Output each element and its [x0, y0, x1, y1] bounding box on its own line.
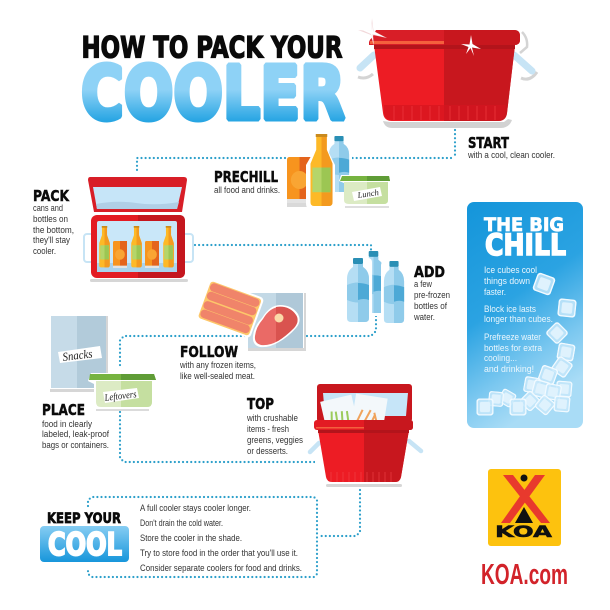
- panel heading: [484, 214, 566, 262]
- icon: falling ice cubes: [477, 273, 576, 416]
- title: how to pack your: HOW TO PACK YOUR: [82, 30, 343, 64]
- step: pack: cans and: [33, 203, 63, 213]
- dotted connector paths: [88, 130, 455, 577]
- link: koa.com: KOA.com: [481, 559, 568, 591]
- heading: keep your cool: KEEP YOUR: [47, 511, 121, 527]
- panel tips: things down: [484, 276, 530, 286]
- panel tips: bottles for extra: [484, 343, 542, 353]
- text block: cooler tips: [140, 503, 302, 573]
- panel tips: cooling...: [484, 353, 517, 363]
- raised lid: [317, 384, 412, 422]
- step: top: greens, veggies: [247, 435, 303, 445]
- text block: cooler tips: A full cooler stays cooler longer.: [140, 503, 251, 513]
- step: pack: cooler.: [33, 246, 56, 256]
- step: top: TOP: [247, 395, 274, 413]
- step: top: [246, 395, 303, 456]
- step: place: [42, 401, 109, 450]
- text block: cooler tips: Try to store food in the order that you'll use it.: [140, 548, 298, 558]
- ribs: [384, 105, 506, 120]
- side handles: [84, 234, 96, 262]
- panel tips: longer than cubes.: [484, 314, 553, 324]
- step: follow: [179, 343, 256, 381]
- step: pack: PACK: [33, 187, 70, 205]
- step: pack: they'll stay: [33, 235, 70, 245]
- heading: keep your cool: [40, 511, 129, 563]
- lid: [88, 177, 187, 212]
- heading: keep your cool: COOL: [48, 527, 122, 563]
- step: add: pre-frozen: [414, 290, 450, 300]
- step: place: PLACE: [42, 401, 85, 419]
- step: add: bottles of: [414, 301, 447, 311]
- logo: koa: [488, 469, 561, 546]
- step: add: ADD: [414, 263, 445, 281]
- panel tips: Block ice lasts: [484, 304, 536, 314]
- step: follow: FOLLOW: [180, 343, 238, 361]
- step: start: [467, 134, 555, 160]
- step: top: or desserts.: [247, 446, 288, 456]
- step: prechill: [214, 168, 280, 195]
- panel heading: THE BIG: [484, 214, 564, 236]
- step: pack: bottles on: [33, 214, 68, 224]
- lunch container: [339, 175, 392, 206]
- icon: snacks bag and leftovers container: Snacks: [62, 346, 93, 364]
- title: cooler: COOLER: [81, 51, 345, 137]
- body: [374, 45, 515, 121]
- step: place: labeled, leak-proof: [42, 429, 109, 439]
- step: prechill: PRECHILL: [214, 168, 278, 186]
- step: place: food in clearly: [42, 419, 92, 429]
- panel tips: faster.: [484, 287, 506, 297]
- panel heading: CHILL: [485, 228, 566, 262]
- step: follow: with any frozen items,: [179, 360, 256, 370]
- panel tips: Ice cubes cool: [484, 265, 537, 275]
- step: add: a few: [414, 279, 432, 289]
- rim: [314, 420, 413, 430]
- step: pack: the bottom,: [33, 225, 74, 235]
- panel tips: Prefreeze water: [484, 332, 541, 342]
- icon: prechilled drinks and lunch container: [287, 134, 392, 209]
- base: [91, 215, 185, 278]
- text block: cooler tips: Store the cooler in the shade.: [140, 533, 242, 543]
- step: pack: [33, 187, 74, 256]
- lid: [369, 30, 520, 45]
- text block: cooler tips: Consider separate coolers for food and drinks.: [140, 563, 302, 573]
- icon: snacks bag and leftovers container: [50, 316, 157, 411]
- handles: [310, 441, 421, 452]
- step: start: START: [468, 134, 510, 152]
- body: [318, 430, 409, 482]
- panel: the big chill: [467, 202, 583, 428]
- icon: frozen water bottles: [344, 251, 407, 325]
- step: top: items - fresh: [247, 424, 289, 434]
- icon: prechilled drinks and lunch container: Lunch: [356, 187, 379, 200]
- sparkles: [358, 18, 481, 56]
- step: follow: like well-sealed meat.: [180, 371, 255, 381]
- bottles and cans: [99, 226, 110, 267]
- icon: open cooler packed with bottles and cans: [84, 176, 194, 282]
- step: top: with crushable: [246, 413, 298, 423]
- step: add: [413, 263, 450, 322]
- icon: sausages package and frozen meat: [195, 278, 306, 351]
- ribs: [331, 472, 391, 482]
- icon: red cooler topped with greens and veggies: [310, 383, 421, 487]
- step: start: with a cool, clean cooler.: [467, 150, 555, 160]
- step: prechill: all food and drinks.: [214, 185, 280, 195]
- veggie bags: [320, 395, 358, 429]
- step: place: bags or containers.: [42, 440, 109, 450]
- icon: clean red cooler: [358, 18, 537, 128]
- text block: cooler tips: Don't drain the cold water.: [140, 518, 223, 528]
- panel tips: and drinking!: [484, 364, 534, 374]
- handles: [360, 55, 532, 71]
- step: add: water.: [413, 312, 435, 322]
- logo: koa: KOA: [495, 522, 553, 541]
- shadow: [383, 119, 512, 128]
- panel tips: [484, 265, 553, 374]
- icon: snacks bag and leftovers container: Leftovers: [103, 389, 137, 404]
